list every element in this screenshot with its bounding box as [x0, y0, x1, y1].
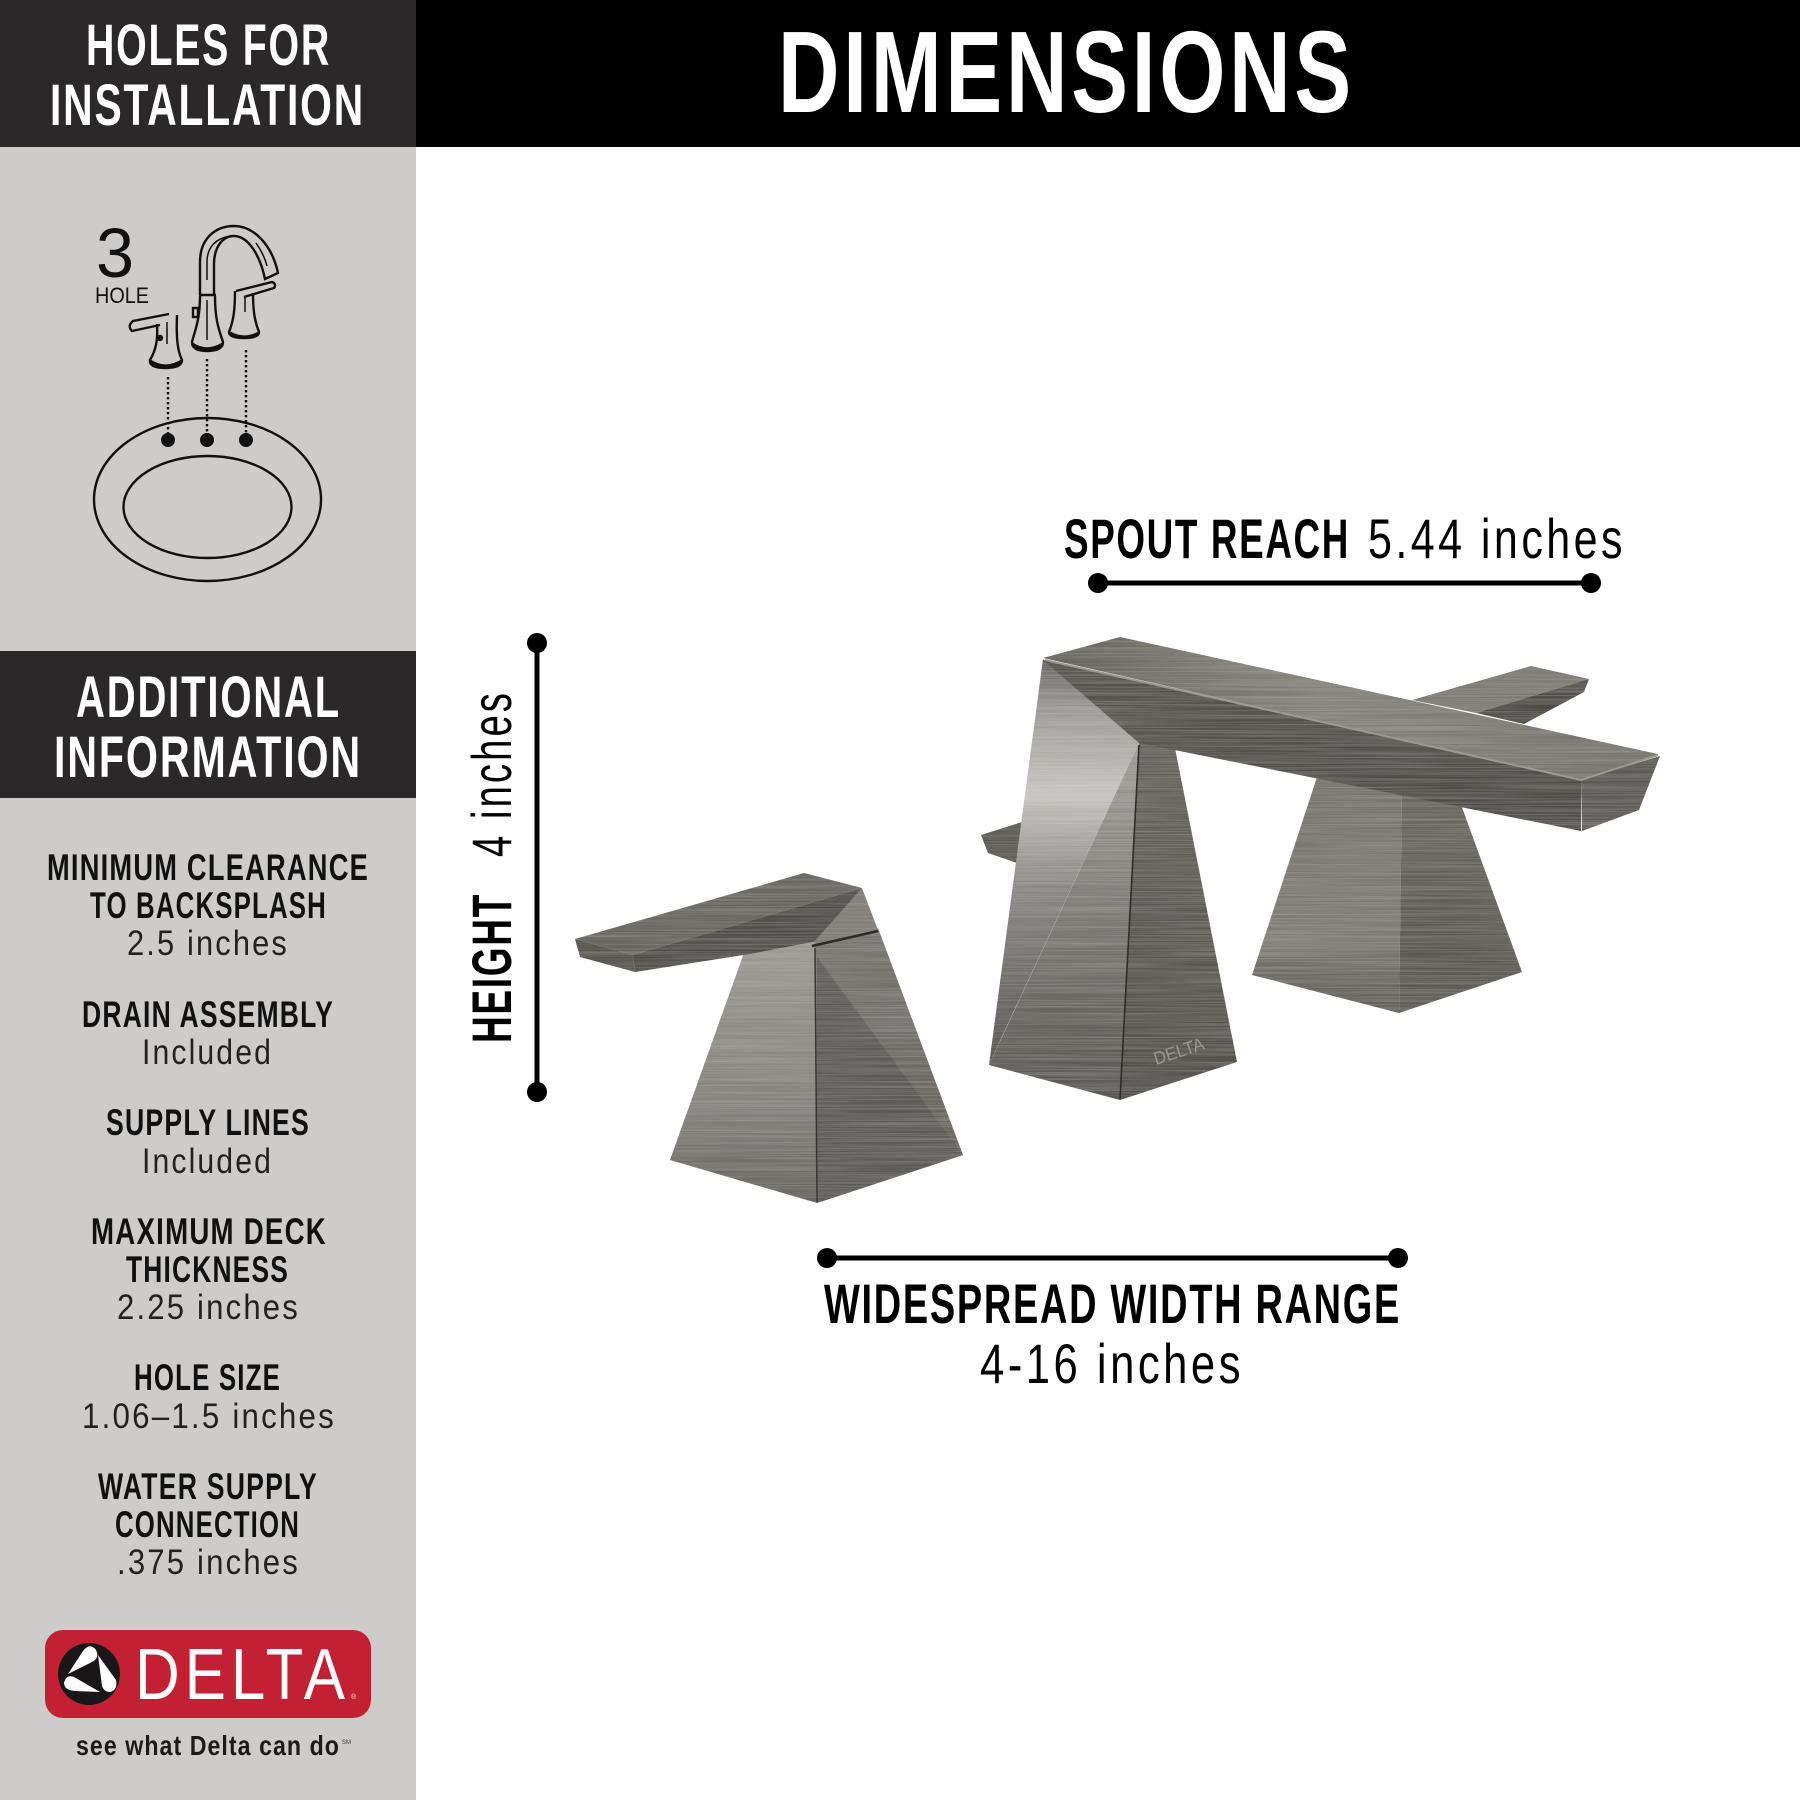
icon: left handle [130, 314, 182, 368]
front column [989, 659, 1237, 1100]
tagline: see what Delta can do [76, 1730, 340, 1761]
handle edge [815, 948, 817, 1202]
title banner [416, 0, 1800, 147]
heading: additional information: INFORMATION [54, 725, 362, 790]
logo mark on faucet: DELTA [1151, 1034, 1207, 1069]
spec: minimum clearance: TO BACKSPLASH [90, 885, 327, 926]
icon: right handle [229, 282, 275, 338]
dimension: height: HEIGHT [460, 893, 523, 1043]
spec: hole size: 1.06–1.5 inches [82, 1397, 336, 1436]
heading: holes for installation: INSTALLATION [50, 73, 365, 138]
faucet: left handle [575, 873, 963, 1203]
spout top [1043, 637, 1658, 780]
dimension: widespread width range: WIDESPREAD WIDTH RANGE [824, 1272, 1401, 1335]
handle body [670, 928, 963, 1203]
icon: spout [192, 226, 278, 351]
spec: water supply connection [98, 1466, 318, 1582]
spec: drain assembly [82, 994, 334, 1072]
dimension: spout reach: 5.44 inches [1368, 507, 1626, 570]
heading: holes for installation: HOLES FOR [86, 13, 331, 78]
rear column [1252, 774, 1522, 1013]
logo: delta: ® [351, 1693, 357, 1701]
dimension: spout reach [1064, 507, 1626, 593]
spec: minimum clearance: MINIMUM CLEARANCE [47, 847, 369, 888]
hole count label [95, 214, 149, 308]
spout highlight [1045, 660, 1658, 780]
hole count label: HOLE [95, 283, 149, 308]
spec: maximum deck thickness [91, 1211, 327, 1327]
spec: drain assembly: Included [142, 1033, 273, 1072]
spec: supply lines: Included [142, 1142, 273, 1181]
panel: sidebar [0, 0, 416, 1800]
dimension: height [460, 633, 547, 1102]
lever [575, 873, 878, 972]
spec: maximum deck thickness: THICKNESS [126, 1249, 289, 1290]
hole count label: 3 [96, 214, 134, 292]
faucet: spout and rear handle assembly [981, 637, 1660, 1100]
logo: delta: DELTA [135, 1635, 350, 1715]
icon: dotted guide lines [168, 350, 246, 434]
dimension: spout reach: SPOUT REACH [1064, 507, 1350, 570]
dimension: widespread width range: 4-16 inches [980, 1332, 1244, 1395]
tagline: SM [342, 1740, 351, 1746]
column edge highlight [1120, 745, 1139, 1099]
spec: hole size [82, 1357, 336, 1436]
dimension: widespread width range [817, 1248, 1408, 1395]
spec: minimum clearance: 2.5 inches [127, 924, 289, 963]
spec: supply lines: SUPPLY LINES [106, 1102, 310, 1143]
icon: sink basin [124, 456, 292, 558]
title banner: DIMENSIONS [778, 7, 1355, 137]
spout end face [1581, 756, 1660, 831]
spec: hole size: HOLE SIZE [134, 1357, 281, 1398]
icon: faucet holes [161, 433, 253, 447]
left lever behind column [981, 822, 1022, 864]
spec: drain assembly: DRAIN ASSEMBLY [82, 994, 334, 1035]
spec: maximum deck thickness: MAXIMUM DECK [91, 1211, 327, 1252]
icon: sink outer rim [94, 418, 321, 581]
spec: water supply connection: .375 inches [117, 1543, 300, 1582]
handle seam [812, 931, 878, 946]
heading: additional information: ADDITIONAL [76, 665, 341, 730]
spout front face [1043, 660, 1581, 831]
logo: delta [45, 1630, 371, 1718]
spec: water supply connection: CONNECTION [115, 1504, 300, 1545]
spec: maximum deck thickness: 2.25 inches [117, 1288, 300, 1327]
spec: minimum clearance [47, 847, 369, 963]
right lever behind spout [1412, 666, 1589, 724]
heading: holes for installation [0, 0, 416, 147]
dimension: height: 4 inches [460, 690, 523, 857]
spec: water supply connection: WATER SUPPLY [98, 1466, 318, 1507]
heading: additional information [0, 651, 416, 798]
spec: supply lines [106, 1102, 310, 1181]
icon: three hole faucet and sink [94, 214, 321, 581]
